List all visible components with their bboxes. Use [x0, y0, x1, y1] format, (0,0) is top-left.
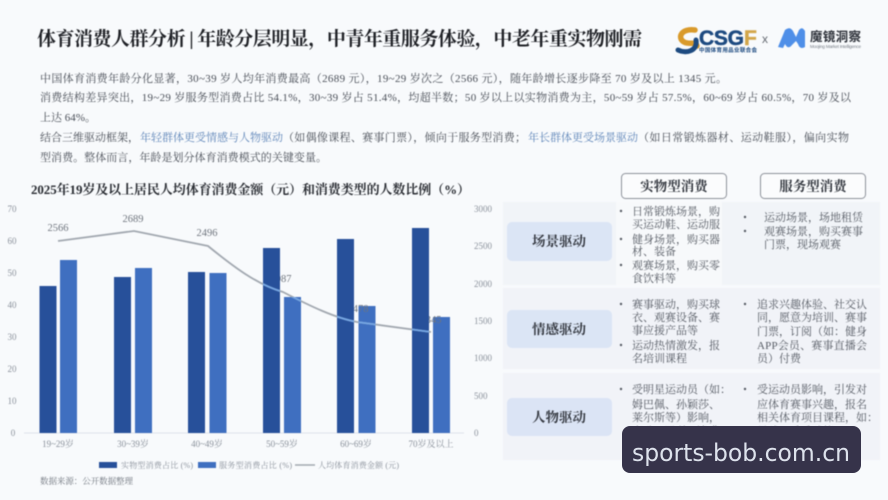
line: per capita spend	[58, 231, 431, 332]
category labels: 60~69岁	[340, 438, 372, 449]
text block: summary: （如偶像课程、赛事门票），倾向于服务型消费；	[283, 130, 526, 144]
text block: summary: 年轻群体更受情感与人物驱动	[140, 130, 283, 144]
panel: scene driven: 场景驱动	[532, 233, 586, 249]
category labels: 40~49岁	[191, 438, 223, 449]
category labels: 19~29岁	[42, 438, 74, 449]
right axis: 1000	[474, 353, 492, 363]
right axis: 500	[474, 391, 488, 401]
left axis: 40	[8, 300, 17, 310]
panel: scene driven: 日常锻炼场景，购	[632, 204, 720, 218]
logo: CSGF x Moojing: x	[762, 32, 768, 46]
panel: emotion driven: 追求兴趣体验、社交认	[757, 297, 867, 311]
panel: scene driven: 食饮料等	[632, 271, 676, 285]
panel: emotion driven	[503, 288, 880, 369]
panel: scene driven: 观赛场景，购买零	[632, 258, 720, 272]
logo: CSGF x Moojing: Moojing Market Intelligence	[810, 44, 861, 49]
column header: goods: 实物型消费	[640, 178, 709, 194]
right axis	[474, 204, 492, 438]
line value labels: 2566	[48, 223, 68, 234]
text block: summary: 年长群体更受场景驱动	[528, 130, 638, 144]
column header: service	[760, 174, 866, 198]
title: 体育消费人群分析 | 年龄分层明显，中青年重服务体验，中老年重实物刚需	[37, 27, 642, 50]
legend: 人均体育消费金额 (元)	[318, 460, 399, 470]
panel: emotion driven: 运动热情激发，报	[632, 338, 720, 352]
logo: CSGF x Moojing: 魔镜洞察	[810, 26, 861, 45]
line value labels: 1478	[348, 304, 368, 315]
watermark	[622, 426, 861, 473]
service bars	[60, 260, 450, 433]
column header: goods	[622, 174, 726, 198]
panel: emotion driven: 门票，订阅（如：健身	[757, 324, 867, 338]
category labels: 50~59岁	[266, 438, 298, 449]
text block: summary: 型消费。整体而言，年龄是划分体育消费模式的关键变量。	[40, 150, 327, 164]
icon: CSGF swirl	[678, 30, 697, 52]
left axis: 60	[8, 236, 17, 246]
right axis: 0	[474, 428, 479, 438]
logo: CSGF x Moojing: CSG	[699, 27, 744, 50]
left axis: 10	[8, 396, 17, 406]
text block: summary: 中国体育消费年龄分化显著，30~39 岁人均年消费最高（2689 元），19~29 岁次之（2566 元），随年龄增长逐步降至 70 岁及以上 1345 元。	[40, 71, 727, 85]
panel: scene driven: 门票，现场观赛	[764, 237, 841, 251]
legend: 服务型消费占比 (%)	[219, 460, 292, 470]
icon: M logo	[778, 28, 805, 48]
panel: scene driven: 材、装备	[632, 244, 676, 258]
panel: person driven: 产生“同款”消费	[632, 424, 721, 438]
text block: summary: 上达 64%。	[40, 110, 96, 124]
panel: emotion driven: 情感驱动	[532, 321, 586, 337]
combo chart: bars and line	[8, 204, 492, 470]
logo: CSGF x Moojing	[678, 26, 861, 54]
panel: person driven: 姆巴佩、孙颖莎、	[632, 397, 720, 411]
goods bars	[40, 228, 429, 433]
panel: emotion driven: 事应援产品等	[632, 323, 698, 337]
panel: scene driven	[503, 202, 880, 285]
right axis: 1500	[474, 316, 492, 326]
left axis	[8, 204, 17, 438]
panel: scene driven: 买运动鞋、运动服	[632, 217, 720, 231]
panel: emotion driven: 同，愿意为培训、赛事	[757, 310, 867, 324]
left axis: 50	[8, 268, 17, 278]
category labels: 30~39岁	[117, 438, 149, 449]
category labels	[42, 438, 454, 449]
panel: scene driven: 观赛场景，购买赛事	[764, 224, 863, 238]
chart title: 2025年19岁及以上居民人均体育消费金额（元）和消费类型的人数比例（%）	[31, 182, 470, 197]
panel: emotion driven: 衣、观赛设备、赛	[632, 310, 720, 324]
text block: summary: 结合三维驱动框架，	[40, 130, 139, 144]
panel: person driven: 受明星运动员（如：	[632, 382, 731, 396]
panel: person driven	[503, 373, 880, 460]
left axis: 70	[8, 204, 17, 214]
panel: person driven: 受运动员影响，引发对	[757, 382, 867, 396]
text block: summary	[40, 71, 852, 164]
watermark: sports-bob.com.cn	[632, 439, 850, 467]
right axis: 3000	[474, 204, 492, 214]
line value labels: 2689	[122, 214, 144, 225]
line value labels: 1345	[420, 315, 442, 326]
right axis: 2500	[474, 241, 492, 251]
legend	[99, 460, 399, 470]
line value labels	[48, 214, 442, 326]
right axis: 2000	[474, 279, 492, 289]
category labels: 70岁及以上	[408, 438, 454, 449]
text block: summary: （如日常锻炼器材、运动鞋服），偏向实物	[638, 130, 849, 144]
text block: summary: 消费结构差异突出，19~29 岁服务型消费占比 54.1%，30~39 岁占 51.4%，均超半数；50 岁以上以实物消费为主，50~59 岁占 57.5%，60~69 岁占 60.5%，70 岁及以	[40, 90, 852, 104]
panel: person driven: 莱尔斯等）影响，	[632, 410, 720, 424]
panel: person driven: 应体育赛事兴趣，报名	[757, 397, 867, 411]
left axis: 30	[8, 332, 17, 342]
panel: emotion driven: 名培训课程	[632, 351, 687, 365]
line value labels: 2496	[196, 228, 218, 239]
source note: 数据来源：公开数据整理	[40, 476, 133, 486]
panel: emotion driven: 员）付费	[757, 351, 802, 365]
panel: person driven: 足球、乒乓球等	[757, 424, 834, 438]
line value labels: 2087	[270, 274, 292, 285]
column header: service: 服务型消费	[779, 178, 848, 194]
panel: person driven: 人物驱动	[532, 409, 586, 425]
legend: 实物型消费占比 (%)	[121, 460, 193, 470]
panel: scene driven: 健身场景，购买器	[632, 232, 720, 246]
left axis: 20	[8, 364, 17, 374]
panel: person driven: 相关体育项目课程，如：	[757, 410, 878, 424]
panel: emotion driven: 赛事驱动，购买球	[632, 297, 720, 311]
logo: CSGF x Moojing: 中国体育用品业联合会	[699, 46, 757, 54]
left axis: 0	[11, 428, 16, 438]
logo: CSGF x Moojing: F	[744, 27, 757, 50]
panel: emotion driven: APP会员、赛事直播会	[757, 338, 867, 352]
panel: scene driven: 运动场景，场地租赁	[764, 210, 864, 224]
